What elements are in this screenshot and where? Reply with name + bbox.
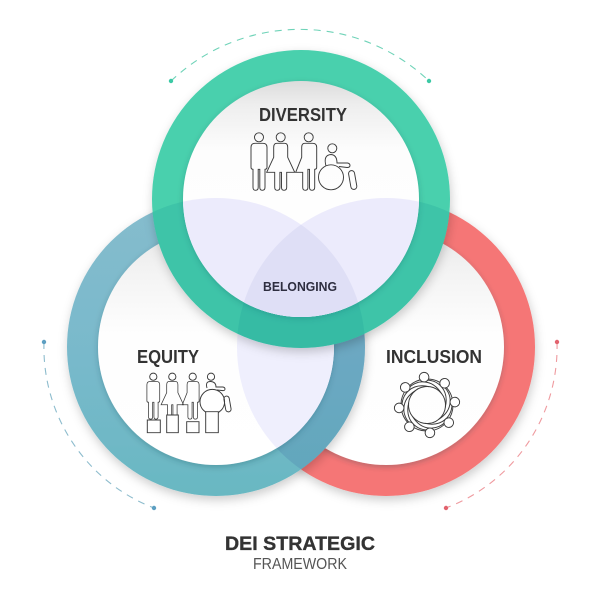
title: DEI STRATEGIC [225, 533, 375, 555]
dashed arc: left [42, 340, 156, 510]
heading: diversity: DIVERSITY [259, 105, 347, 125]
blue ring: equity [64, 212, 370, 504]
heading: inclusion: INCLUSION [386, 347, 482, 367]
lavender lens: equity and inclusion overlap [237, 334, 334, 448]
heading: equity: EQUITY [137, 347, 199, 367]
dashed arc: top [169, 29, 431, 83]
icon: diversity people [251, 133, 357, 190]
red ring: inclusion [237, 198, 535, 496]
belonging overlap regions [183, 198, 419, 317]
icon: inclusion circle of nodes [386, 364, 468, 446]
subtitle: FRAMEWORK [253, 556, 348, 573]
icon: equity people on boxes [147, 373, 232, 433]
label: belonging: BELONGING [263, 279, 337, 294]
dashed arc: right [444, 340, 559, 510]
green ring: diversity [148, 50, 456, 356]
